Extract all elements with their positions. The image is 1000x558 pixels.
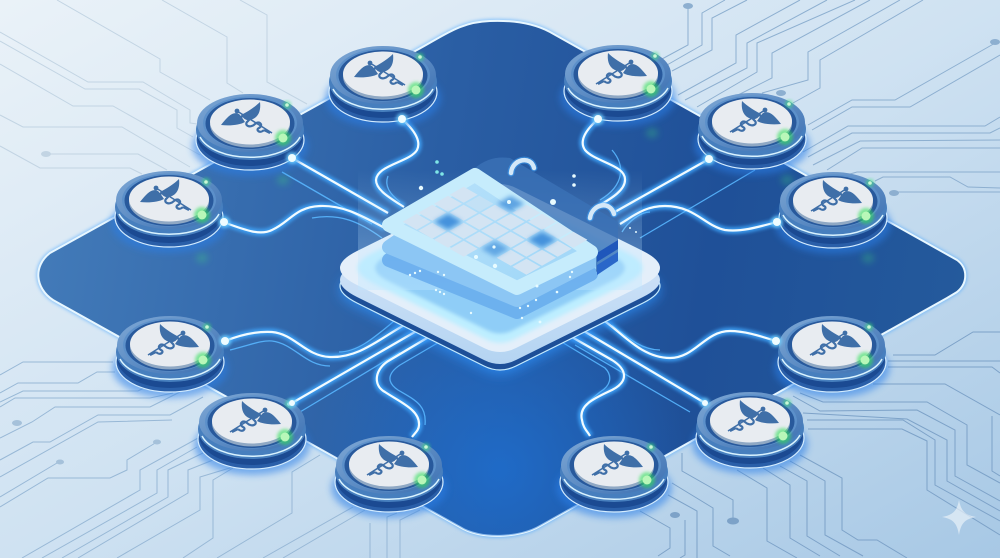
circuit traces: bottom right <box>640 332 1000 558</box>
node disc: top left 2 <box>192 94 308 176</box>
calendar: binder rings <box>511 160 614 218</box>
node disc: bottom 9 <box>331 436 447 518</box>
node disc: right 6 <box>775 172 891 254</box>
floating data particles <box>409 160 637 323</box>
node disc: lower right 12 <box>774 316 890 398</box>
calendar: day cells <box>403 187 587 275</box>
node disc: lower left 7 <box>112 316 228 398</box>
connector lines glow <box>223 119 777 437</box>
central platform <box>340 184 660 374</box>
circuit traces: top left <box>0 0 307 174</box>
calendar: stacked layers <box>389 188 591 312</box>
connector end nodes <box>218 113 783 408</box>
node disc: lower left 8 <box>194 393 310 475</box>
calendar: back panel and binding edge <box>475 157 618 275</box>
circuit traces: top right <box>662 0 1000 196</box>
calendar: highlighted days <box>434 196 556 257</box>
node disc: lower right 11 <box>692 392 808 474</box>
secondary thin blue traces <box>230 150 755 425</box>
node disc: top 1 <box>325 46 441 128</box>
node disc: top right 5 <box>694 93 810 175</box>
circuit traces: bottom left <box>0 362 420 558</box>
sparkle watermark <box>942 500 976 535</box>
node disc: bottom 10 <box>556 436 672 518</box>
node disc: top 4 <box>560 45 676 127</box>
connector lines core <box>223 119 777 437</box>
node disc: left 3 <box>111 171 227 253</box>
calendar: top glass sheet <box>389 175 591 288</box>
green disc reflections <box>196 128 874 263</box>
glass light column <box>358 170 642 290</box>
